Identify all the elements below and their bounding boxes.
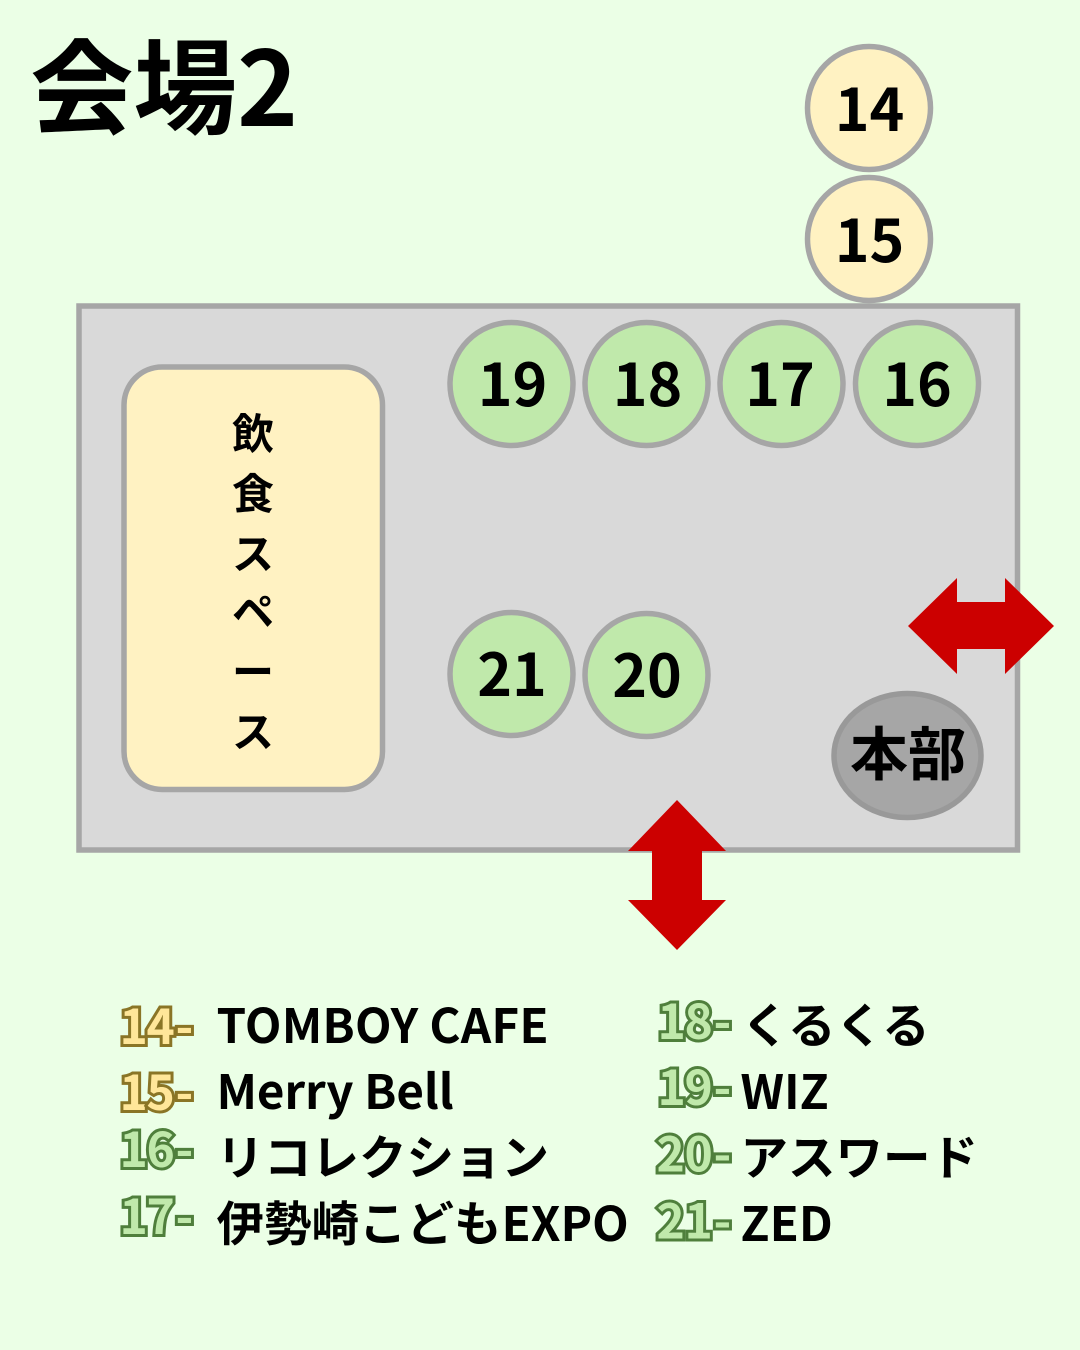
booth 18: 18: [613, 338, 682, 423]
arrow: east exit: [908, 578, 1054, 674]
booth 16: 16: [882, 338, 952, 423]
legend item 16: [120, 1111, 549, 1189]
legend item 17: 7: [146, 1178, 175, 1248]
booth 19: [450, 322, 573, 446]
legend item 18: [658, 983, 930, 1057]
legend item 16: 1: [120, 1111, 148, 1181]
legend item 20: アスワード: [740, 1120, 978, 1189]
legend item 14: -: [176, 988, 193, 1058]
legend item 17: 1: [120, 1178, 148, 1248]
food and drink space: ー: [232, 639, 274, 700]
legend item 15: 1: [120, 1054, 148, 1124]
legend item 14: TOMBOY CAFE: [216, 988, 549, 1057]
food and drink space: ス: [232, 521, 274, 582]
booth 17: 17: [745, 338, 815, 423]
legend item 21: 1: [684, 1182, 713, 1252]
legend item 18: 8: [684, 983, 713, 1053]
legend item 20: -: [714, 1116, 731, 1186]
legend item 20: 0: [684, 1116, 713, 1186]
legend item 19: -: [714, 1049, 731, 1119]
arrow: south exit: [628, 800, 726, 950]
booth 16: [856, 322, 978, 446]
legend item 16: -: [176, 1111, 193, 1181]
legend item 20: 2: [656, 1116, 685, 1186]
legend item 21: -: [714, 1182, 731, 1252]
legend item 21: 2: [656, 1182, 685, 1252]
food and drink space: [124, 367, 382, 790]
booth 21: [450, 612, 573, 736]
legend item 18: 1: [658, 983, 686, 1053]
legend item 17: 伊勢崎こどもEXPO: [216, 1186, 629, 1255]
legend item 19: 1: [658, 1049, 686, 1119]
booth 19: 19: [478, 338, 547, 423]
legend item 16: 6: [146, 1111, 175, 1181]
legend item 14: 1: [120, 988, 148, 1058]
legend item 19: 9: [684, 1049, 713, 1119]
legend item 18: -: [714, 983, 731, 1053]
legend: [120, 983, 978, 1255]
legend item 15: -: [176, 1054, 193, 1124]
food and drink space: 飲: [232, 401, 274, 462]
headquarters: [834, 694, 981, 818]
booth 14: 14: [835, 63, 904, 148]
legend item 15: 5: [146, 1054, 175, 1124]
booth 15: [808, 178, 930, 300]
legend item 21: ZED: [740, 1186, 833, 1255]
legend item 16: リコレクション: [216, 1120, 549, 1189]
legend item 19: WIZ: [740, 1054, 829, 1123]
legend item 15: Merry Bell: [216, 1054, 454, 1123]
legend item 15: [120, 1054, 454, 1124]
booth 17: [720, 322, 843, 446]
food and drink space: ス: [232, 699, 274, 760]
title: 会場2: [30, 6, 298, 156]
booth 15: 15: [835, 194, 904, 279]
legend item 18: くるくる: [742, 988, 930, 1057]
booth 21: 21: [477, 628, 547, 713]
booth 18: [585, 322, 708, 446]
legend item 21: [656, 1182, 833, 1255]
legend item 19: [658, 1049, 829, 1123]
booth 20: [585, 614, 708, 736]
booth 14: [808, 46, 930, 170]
food and drink space: 食: [232, 461, 274, 522]
legend item 14: 4: [146, 988, 175, 1058]
legend item 20: [656, 1116, 978, 1189]
legend item 17: -: [176, 1178, 193, 1248]
panel: venue floor: [79, 306, 1018, 850]
headquarters: 本部: [850, 708, 966, 792]
booth 20: 20: [612, 629, 682, 714]
food and drink space: ペ: [232, 579, 274, 640]
